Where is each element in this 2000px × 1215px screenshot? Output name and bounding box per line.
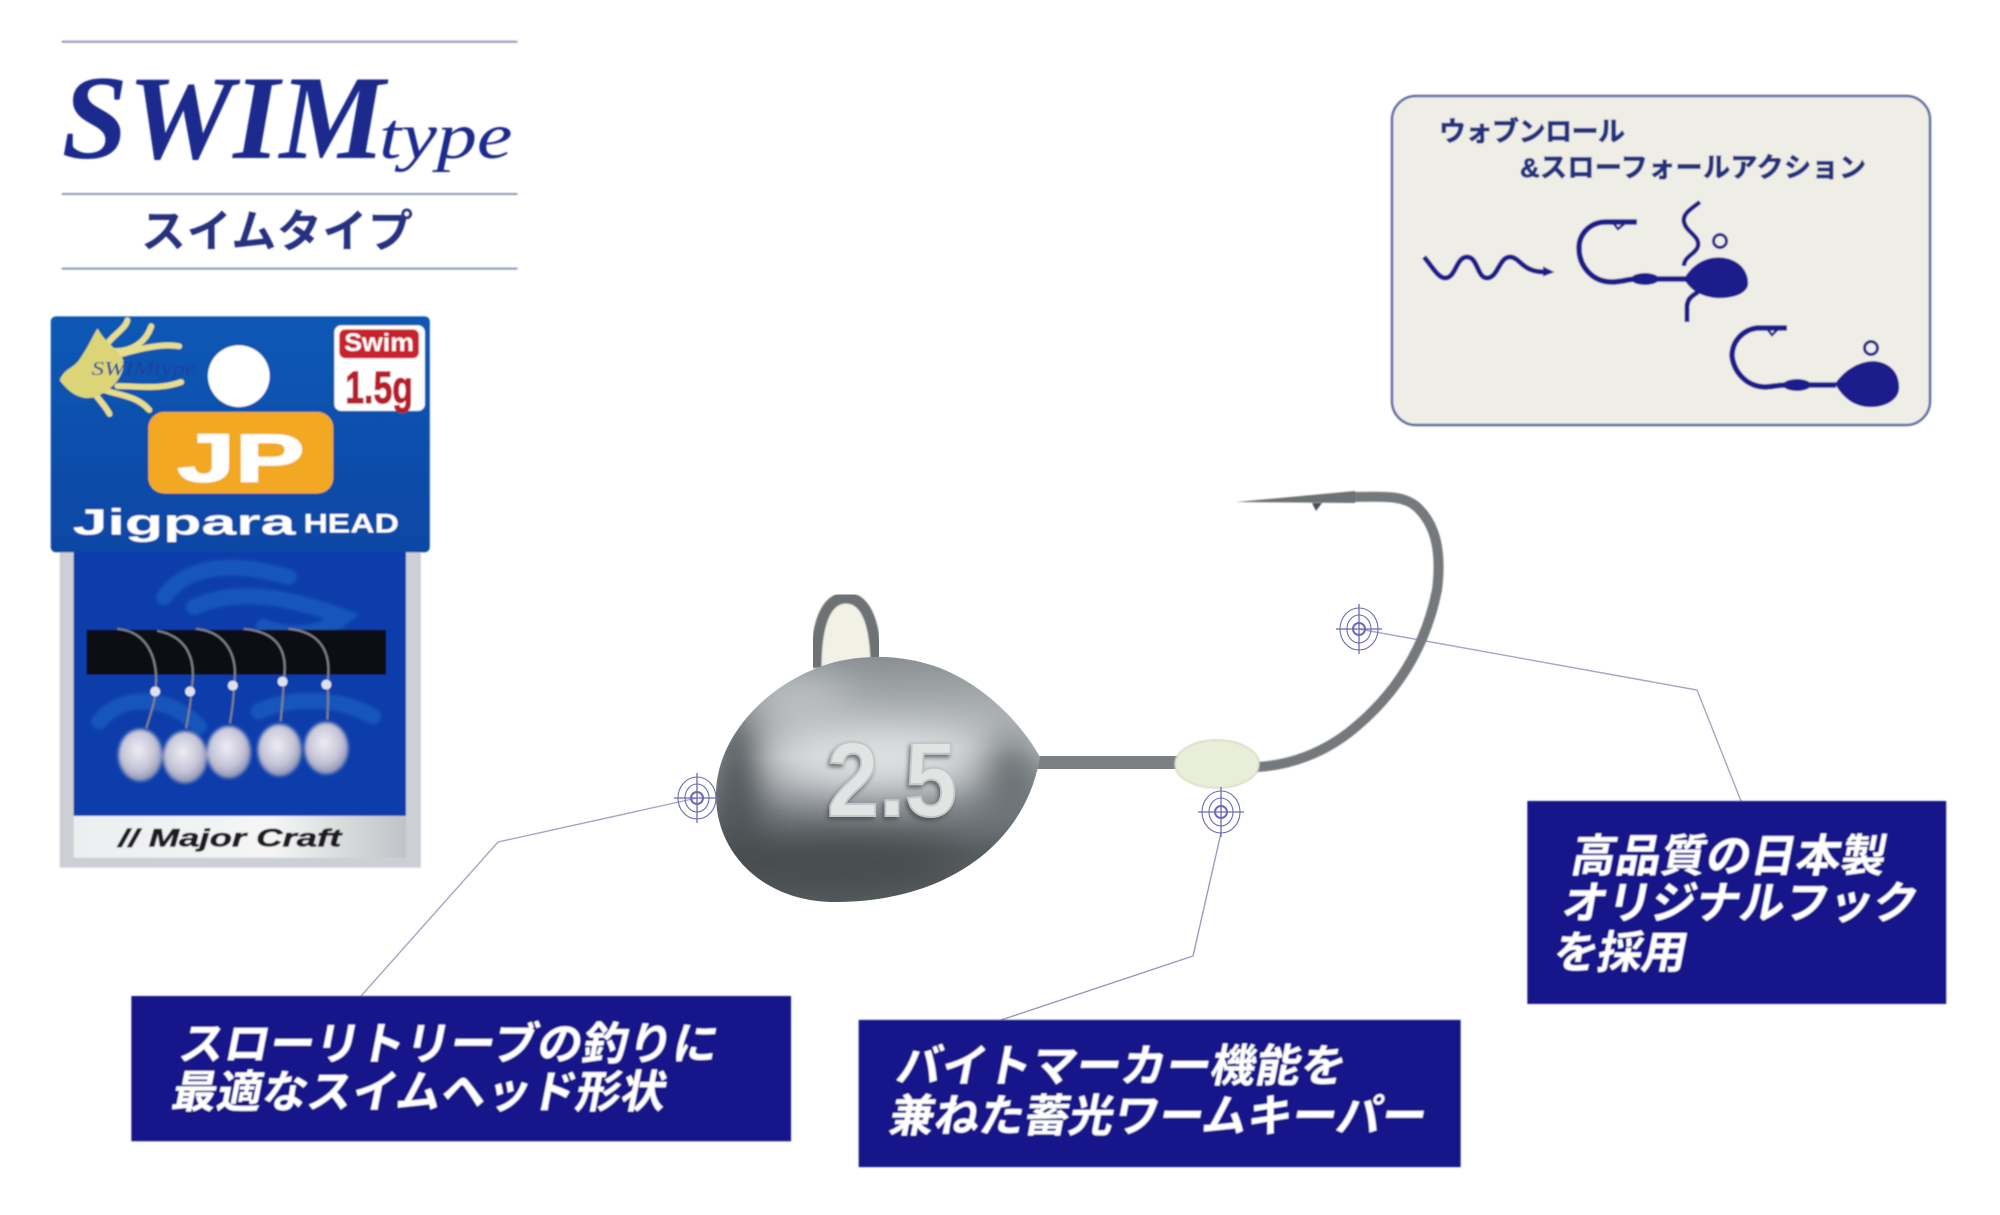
jig swimming with tail [1579, 202, 1748, 322]
product name: HEAD [303, 508, 399, 538]
callout: swim head shape [131, 996, 791, 1141]
callout: swim head shape: スローリトリーブの釣りに [175, 1019, 723, 1070]
jig falling [1732, 328, 1899, 407]
flame logo [60, 320, 196, 414]
callout: original hook: オリジナルフック [1558, 878, 1923, 928]
callout: original hook [1527, 801, 1946, 1004]
heading: SWIM type [62, 42, 517, 269]
product name: Jigpara [73, 502, 297, 542]
action panel [1392, 96, 1930, 425]
glow worm keeper [1175, 740, 1259, 788]
faint flame watermark [100, 568, 373, 726]
leader line: head [361, 798, 697, 996]
hook [1236, 491, 1439, 767]
callout: glow keeper: 兼ねた蓄光ワームキーパー [886, 1091, 1432, 1141]
size badge: 1.5g [345, 362, 413, 413]
callout: glow keeper [859, 1020, 1461, 1167]
JP orange badge: JP [177, 422, 304, 497]
callout: swim head shape: 最適なスイムヘッド形状 [168, 1067, 672, 1117]
target marker: head [674, 773, 720, 823]
subtitle: katakana: スイムタイプ [141, 206, 413, 257]
black hook strip [87, 630, 386, 675]
callout: glow keeper: バイトマーカー機能を [893, 1041, 1351, 1091]
leader line: keeper [1001, 833, 1221, 1020]
main jig head illustration [700, 491, 1439, 910]
leader line: hook [1359, 629, 1741, 801]
package header [51, 316, 430, 552]
title: SWIM type: type [379, 100, 512, 173]
target marker: keeper [1198, 787, 1244, 837]
shank [1036, 756, 1178, 769]
title: SWIM type: SWIM [62, 52, 389, 184]
callout: original hook: 高品質の日本製 [1567, 831, 1891, 882]
size badge [334, 325, 425, 413]
wire eye [816, 598, 876, 668]
product package [51, 316, 430, 868]
product name [73, 502, 399, 542]
weight number 2.5: 2.5 [827, 721, 957, 839]
package backing card [60, 537, 421, 868]
callout: original hook: を採用 [1549, 928, 1692, 978]
white circle [208, 345, 270, 407]
silver footer strip [74, 816, 406, 858]
size badge: Swim [344, 329, 414, 357]
target marker: hook [1336, 604, 1382, 654]
brand logo text: // Major Craft [117, 825, 344, 853]
wavy motion arrow [1424, 257, 1552, 278]
flame logo: SWIMtype [92, 358, 196, 380]
head body [716, 656, 1040, 902]
JP orange badge [148, 412, 333, 497]
panel title: ウォブンロール [1439, 116, 1625, 147]
five mini jig heads [117, 629, 348, 783]
panel title: &スローフォールアクション [1520, 153, 1866, 183]
